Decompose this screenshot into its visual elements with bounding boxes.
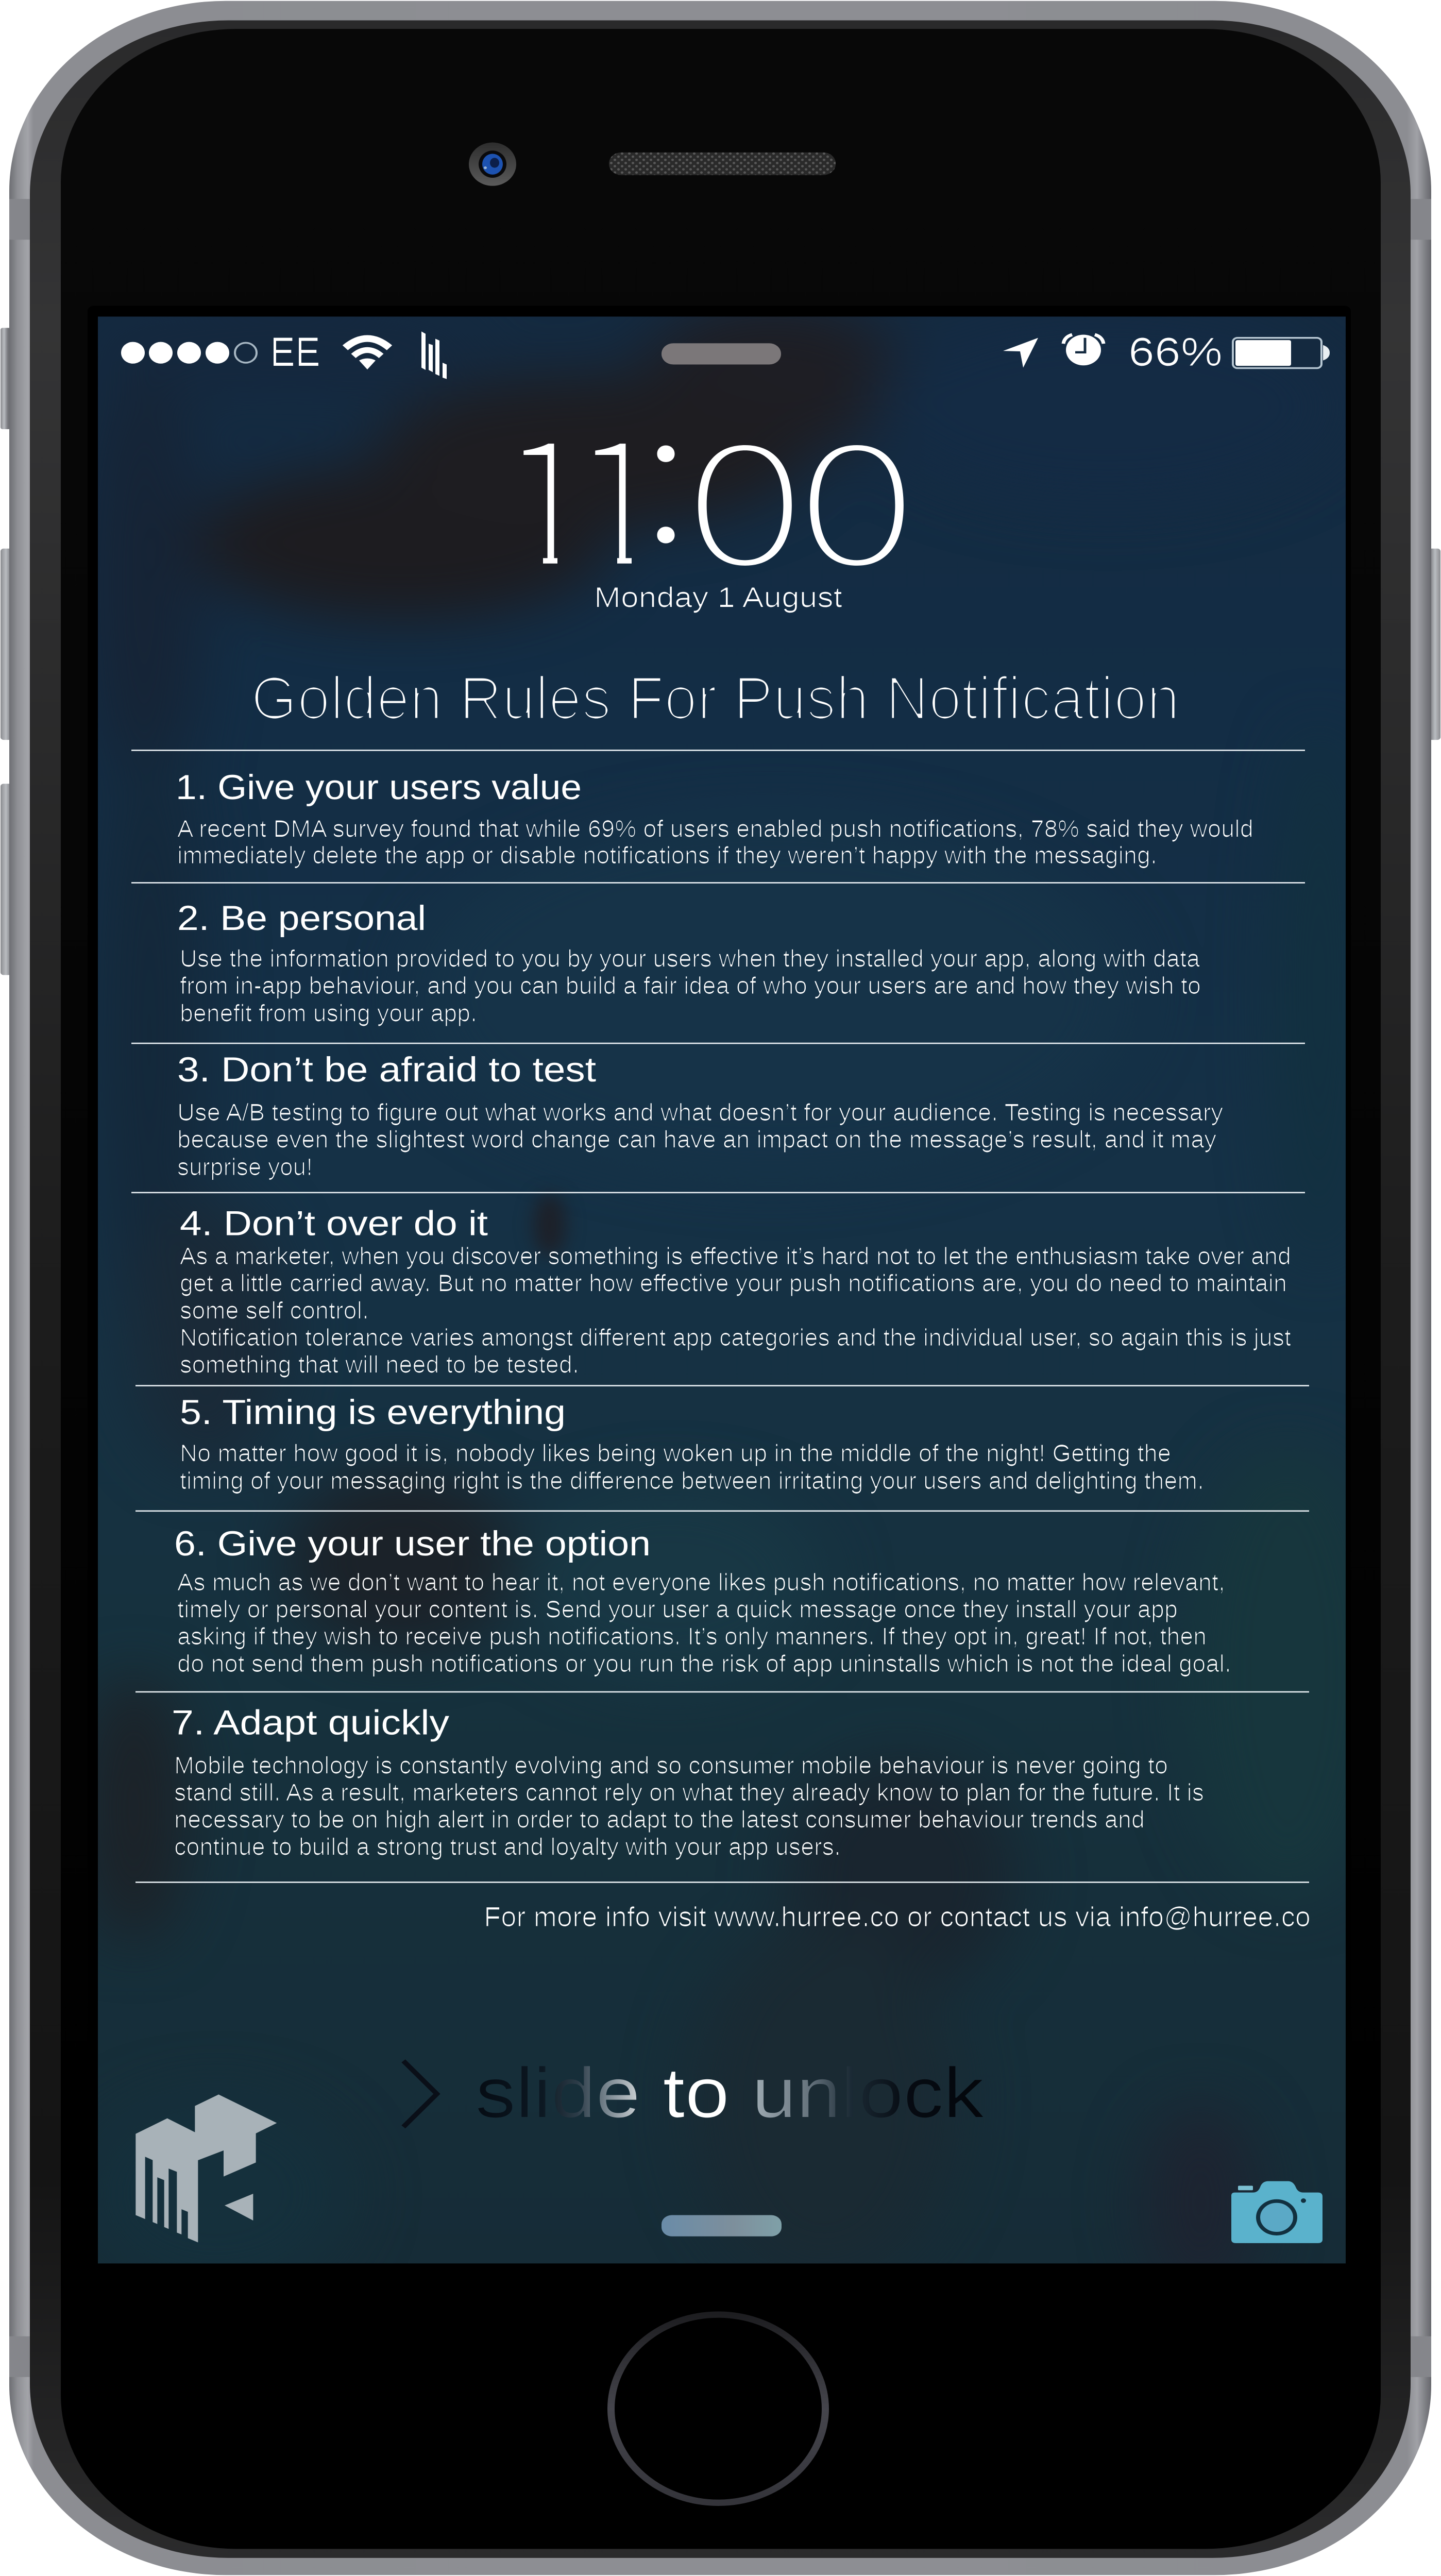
slide to unlock chevron — [403, 2061, 437, 2127]
screen bezel — [88, 306, 1351, 2268]
rule 7 body: continue to build a strong trust and loyalty with your app users. — [174, 1834, 841, 1860]
rule 1 body — [177, 816, 1253, 869]
icon: camera — [1231, 2181, 1323, 2243]
battery percent: 66% — [1128, 329, 1223, 374]
title: Golden Rules For Push Notification — [251, 665, 1180, 732]
bottom pill indicator — [662, 2215, 782, 2236]
rule 7 heading: 7. Adapt quickly — [172, 1703, 449, 1742]
rule 7 body: necessary to be on high alert in order to adapt to the latest consumer behaviour trends and — [174, 1807, 1145, 1833]
rule 6 — [174, 1524, 1231, 1677]
front camera — [469, 143, 516, 186]
rule 6 body: timely or personal your content is. Send your user a quick message once they install your app — [177, 1597, 1178, 1623]
slide to unlock text: slide to unlock — [476, 2054, 984, 2132]
rule 4 body: As a marketer, when you discover something is effective it’s hard not to let the enthusiasm take over and — [180, 1243, 1291, 1269]
rule 3 — [177, 1050, 1223, 1180]
icon: location arrow — [1003, 338, 1038, 368]
rule 4 body: some self control. — [180, 1297, 369, 1324]
rule 3 body: surprise you! — [177, 1154, 313, 1180]
rule 4 body: get a little carried away. But no matter how effective your push notifications are, you do need to maintain — [180, 1270, 1287, 1297]
rule 5 — [180, 1393, 1204, 1494]
rule 6 body: do not send them push notifications or you run the risk of app uninstalls which is not the ideal goal. — [177, 1651, 1231, 1677]
date: Monday 1 August — [594, 582, 842, 613]
icon: alarm clock — [1063, 335, 1104, 365]
rule 3 body: Use A/B testing to figure out what works and what doesn’t for your audience. Testing is necessary — [177, 1099, 1223, 1126]
speaker grille — [609, 152, 836, 175]
button: volume up — [1, 549, 16, 740]
rule 2 heading: 2. Be personal — [177, 899, 426, 938]
rule 7 body: Mobile technology is constantly evolving and so consumer mobile behaviour is never going to — [174, 1753, 1168, 1778]
clock colon: : — [641, 320, 691, 596]
rule 3 heading: 3. Don’t be afraid to test — [177, 1050, 596, 1089]
rule 5 body: No matter how good it is, nobody likes being woken up in the middle of the night! Getting the — [180, 1440, 1171, 1467]
rule 2 body — [180, 945, 1201, 1027]
clock digit zero: 0 — [798, 372, 916, 612]
rule 7 body: stand still. As a result, marketers cannot rely on what they already know to plan for the future. It is — [174, 1780, 1204, 1806]
rule 4 heading: 4. Don’t over do it — [180, 1204, 488, 1243]
icon: battery — [1233, 338, 1330, 368]
rule 6 body — [177, 1569, 1231, 1677]
rule 1 body: immediately delete the app or disable notifications if they weren’t happy with the messaging. — [177, 842, 1157, 869]
rule 7 — [172, 1703, 1204, 1860]
rule 5 heading: 5. Timing is everything — [180, 1393, 566, 1432]
rule 4 body: something that will need to be tested. — [180, 1352, 579, 1378]
button: power — [1425, 549, 1440, 740]
button: volume down — [1, 784, 16, 975]
rule 2 — [177, 899, 1201, 1027]
clock — [523, 444, 904, 566]
rule 6 heading: 6. Give your user the option — [174, 1524, 651, 1563]
rule 1 body: A recent DMA survey found that while 69% of users enabled push notifications, 78% said they would — [177, 816, 1253, 842]
signal dots — [121, 342, 257, 364]
button: mute switch — [1, 328, 11, 429]
status bar left — [121, 330, 447, 379]
rule 5 body: timing of your messaging right is the difference between irritating your users and delighting them. — [180, 1468, 1204, 1494]
rule 6 body: asking if they wish to receive push notifications. It’s only manners. If they opt in, great! If not, then — [177, 1623, 1207, 1650]
rule 7 body — [174, 1753, 1204, 1860]
clock digits one one: 11 — [498, 372, 668, 612]
rule 3 body: because even the slightest word change can have an impact on the message’s result, and it may — [177, 1127, 1216, 1153]
lock screen wallpaper — [82, 303, 1391, 2302]
rule 6 body: As much as we don’t want to hear it, not everyone likes push notifications, no matter how relevant, — [177, 1569, 1225, 1596]
icon: wifi — [345, 338, 389, 369]
icon: hurree bars — [421, 331, 447, 379]
top pill indicator — [662, 343, 781, 365]
home button — [611, 2315, 825, 2503]
rule 4 body: Notification tolerance varies amongst different app categories and the individual user, so again this is just — [180, 1325, 1291, 1351]
rule 1 — [176, 768, 1253, 869]
rule 2 body: Use the information provided to you by your users when they installed your app, along with data — [180, 945, 1200, 972]
rule 3 body — [177, 1099, 1223, 1180]
status bar right — [1003, 329, 1330, 374]
rule 4 — [180, 1204, 1291, 1378]
rule 1 heading: 1. Give your users value — [176, 768, 582, 807]
clock digit zero: 0 — [686, 372, 804, 612]
rule 4 body — [180, 1243, 1291, 1378]
rule 2 body: from in-app behaviour, and you can build a fair idea of who your users are and how they wish to — [180, 973, 1201, 999]
carrier: EE — [270, 330, 320, 375]
hurree logo — [135, 2094, 277, 2242]
rule 5 body — [180, 1440, 1204, 1494]
rule 2 body: benefit from using your app. — [180, 1001, 477, 1027]
footer contact line: For more info visit www.hurree.co or contact us via info@hurree.co — [484, 1902, 1311, 1932]
